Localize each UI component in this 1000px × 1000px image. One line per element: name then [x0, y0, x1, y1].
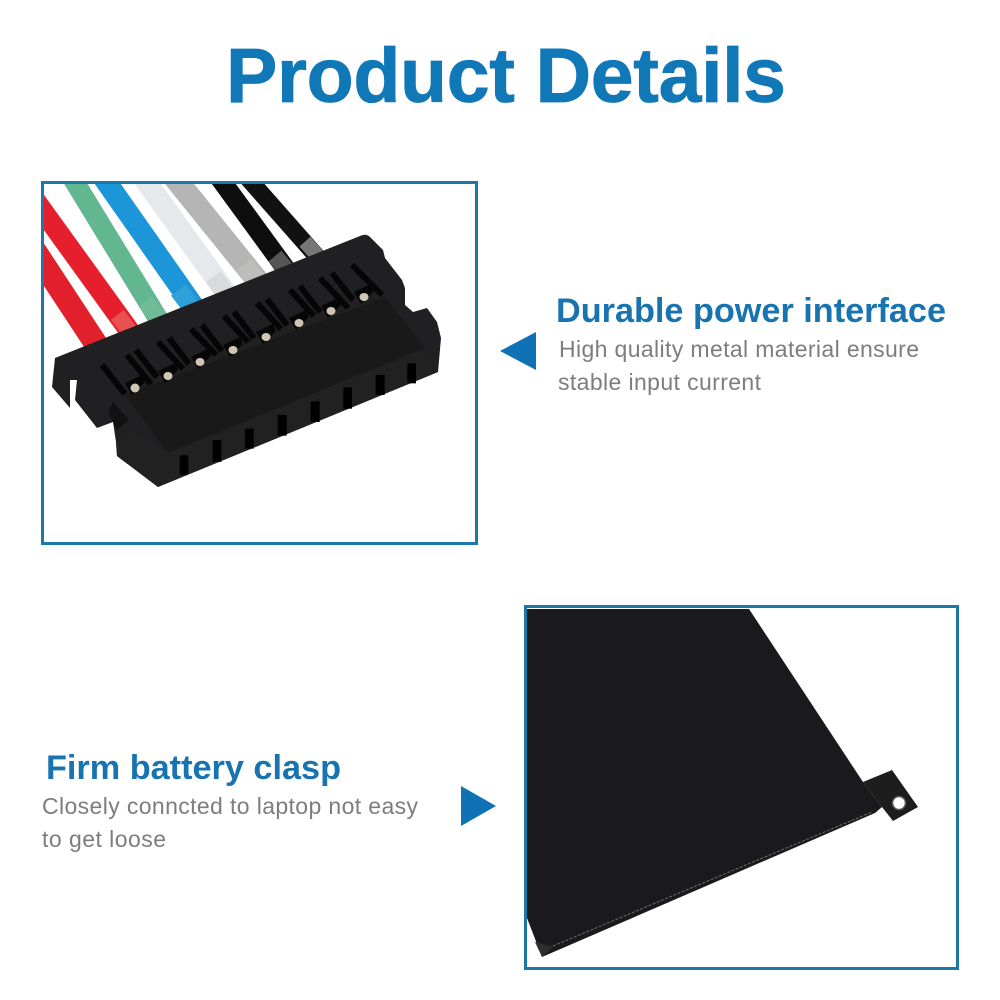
text block: durable power interface: [556, 292, 946, 395]
text block: firm battery clasp: to get loose: [42, 826, 166, 852]
connector front face: [125, 297, 425, 453]
battery edge seam: [553, 812, 872, 946]
battery corner: [535, 942, 553, 957]
connector metal pins: [130, 293, 368, 392]
battery body: [527, 609, 882, 957]
connector contact slots: [102, 265, 382, 394]
wire sleeves: [117, 315, 130, 332]
text block: durable power interface: stable input current: [558, 369, 762, 395]
connector bottom edge: [116, 348, 438, 487]
connector housing: [52, 235, 441, 487]
panel: battery clasp photo: [526, 606, 958, 968]
connector front openings: [180, 363, 416, 475]
connector wires: [44, 184, 324, 346]
battery tab: [863, 770, 918, 821]
arrow: pointing right: [461, 786, 496, 826]
heading: Firm battery clasp: [46, 749, 341, 787]
connector side chamfer: [108, 402, 129, 430]
arrow: pointing left: [500, 332, 536, 370]
title: Product Details: [226, 33, 786, 119]
text block: firm battery clasp: [42, 749, 418, 852]
frame: [42, 182, 476, 544]
description: High quality metal material ensure: [559, 336, 919, 362]
panel: power interface photo: [23, 170, 476, 544]
heading: Durable power interface: [556, 292, 946, 330]
frame: [526, 606, 958, 968]
description: Closely conncted to laptop not easy: [42, 793, 418, 819]
